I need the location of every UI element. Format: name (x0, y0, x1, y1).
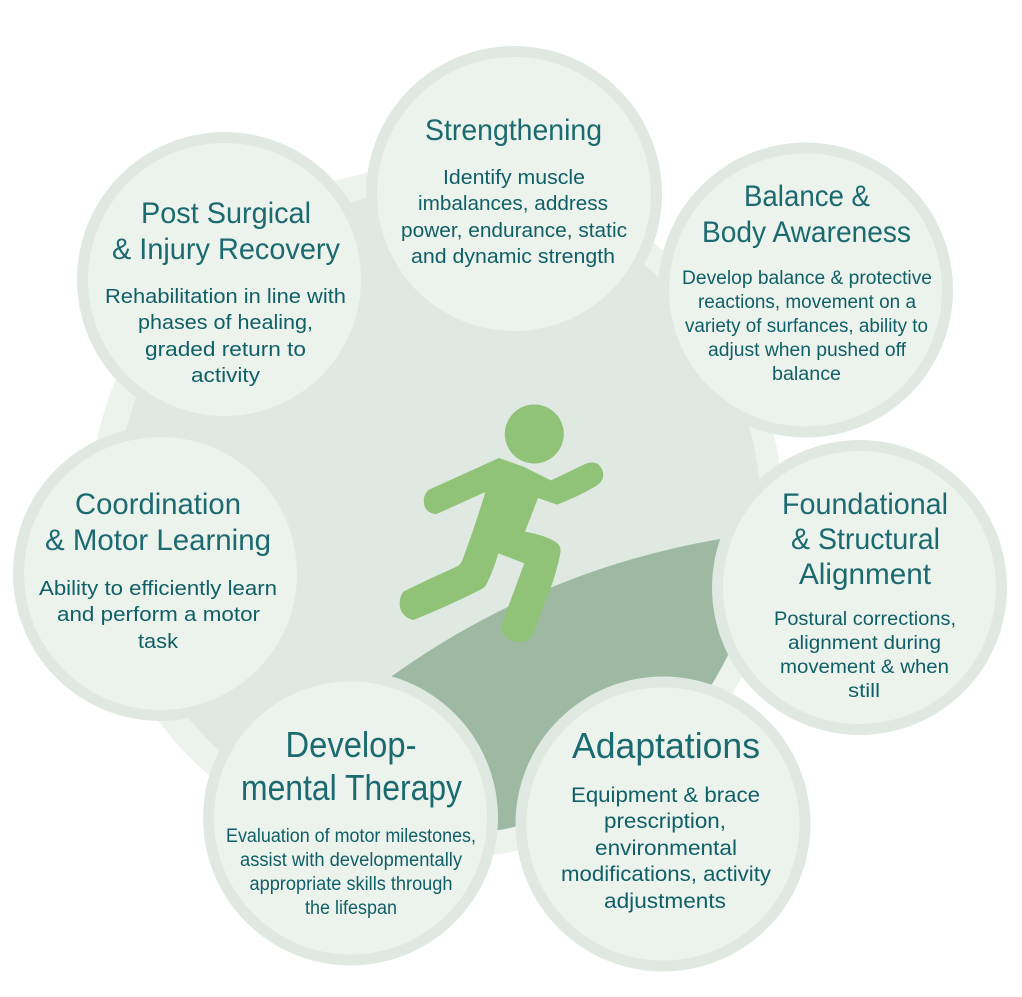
text: foundational description (774, 608, 956, 702)
text: balance description: adjust when pushed off (708, 340, 907, 361)
panel: balance and body awareness (658, 142, 953, 438)
heading: foundational and structural alignment: Alignment (799, 558, 932, 591)
heading: developmental therapy: mental Therapy (241, 767, 462, 808)
heading: balance and body awareness (702, 180, 911, 249)
heading: coordination and motor learning (45, 488, 271, 557)
text: coordination description (39, 577, 277, 653)
text: post surgical description (105, 285, 346, 387)
text: adaptations description: environmental (595, 837, 737, 860)
text: adaptations description (561, 784, 772, 913)
text: balance description (682, 268, 932, 385)
hill (392, 539, 728, 830)
panel: strengthening (366, 46, 662, 342)
text: strengthening description (401, 166, 627, 268)
text: developmental description: the lifespan (305, 898, 397, 919)
text: foundational description: alignment during (788, 632, 941, 654)
text: coordination description: Ability to efficiently learn (39, 577, 277, 600)
text: developmental description: appropriate skills through (250, 874, 452, 895)
text: post surgical description: Rehabilitation in line with (105, 285, 346, 308)
background outer disc (89, 166, 783, 860)
panel: foundational and structural alignment (712, 440, 1007, 735)
text: balance description: reactions, movement on a (698, 292, 916, 313)
heading: foundational and structural alignment: Foundational (782, 488, 948, 521)
heading: post surgical and injury recovery: Post Surgical (141, 197, 311, 230)
heading: balance and body awareness: Balance & (744, 180, 870, 213)
text: strengthening description: imbalances, address (418, 192, 608, 215)
text: balance description: variety of surfances, ability to (685, 316, 928, 337)
heading: foundational and structural alignment: & Structural (791, 523, 940, 556)
background inner disc (115, 190, 761, 836)
text: balance description: Develop balance & protective (682, 268, 932, 289)
text: adaptations description: adjustments (604, 890, 726, 913)
heading: developmental therapy: Develop- (286, 724, 416, 765)
panel: adaptations (516, 676, 810, 972)
heading: post surgical and injury recovery (112, 197, 340, 266)
icon: running figure (400, 404, 603, 642)
text: post surgical description: graded return to (145, 338, 306, 361)
text: strengthening description: power, endurance, static (401, 219, 627, 242)
text: developmental description: assist with developmentally (240, 850, 462, 871)
heading: post surgical and injury recovery: & Injury Recovery (112, 233, 340, 266)
text: foundational description: still (848, 680, 880, 702)
panel: coordination and motor learning (13, 426, 308, 721)
text: strengthening description: Identify muscle (443, 166, 585, 189)
text: adaptations description: modifications, activity (561, 863, 772, 886)
text: developmental description: Evaluation of motor milestones, (226, 826, 476, 847)
text: adaptations description: prescription, (604, 810, 726, 833)
text: foundational description: Postural corrections, (774, 608, 956, 630)
text: post surgical description: phases of healing, (138, 311, 313, 334)
heading: balance and body awareness: Body Awareness (702, 216, 911, 249)
panel: post surgical and injury recovery (77, 132, 372, 427)
text: post surgical description: activity (191, 364, 261, 387)
text: foundational description: movement & when (780, 656, 949, 678)
text: adaptations description: Equipment & brace (571, 784, 760, 807)
text: balance description: balance (772, 364, 841, 385)
heading: foundational and structural alignment (782, 488, 948, 591)
heading: developmental therapy (241, 724, 462, 808)
heading: adaptations: Adaptations (572, 725, 760, 766)
panel: developmental therapy (203, 670, 498, 966)
text: coordination description: task (138, 630, 179, 653)
text: developmental description (226, 826, 476, 919)
heading: coordination and motor learning: Coordination (75, 488, 241, 521)
text: strengthening description: and dynamic strength (411, 245, 615, 268)
heading: strengthening: Strengthening (425, 114, 602, 147)
text: coordination description: and perform a motor (57, 603, 260, 626)
heading: coordination and motor learning: & Motor Learning (45, 524, 271, 557)
